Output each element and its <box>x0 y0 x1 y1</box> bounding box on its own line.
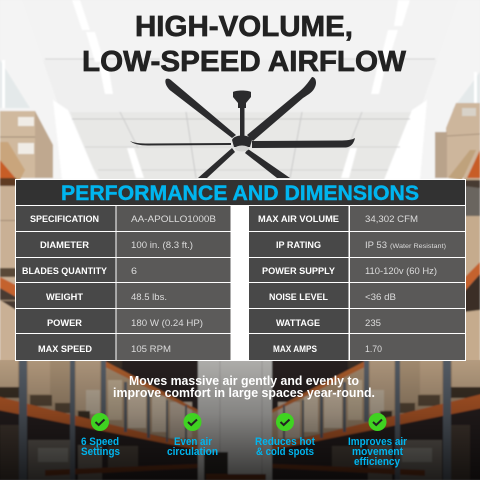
left strip <box>0 178 16 368</box>
label: Reduces hot <box>255 436 315 448</box>
title: LOW-SPEED AIRFLOW <box>82 46 407 78</box>
table: left specifications: 105 RPM <box>131 344 171 355</box>
table: right specifications: 235 <box>365 318 381 329</box>
icon: check <box>368 413 386 431</box>
table: right specifications: 34,302 CFM <box>365 214 418 225</box>
table: left specifications: BLADES QUANTITY <box>22 266 108 277</box>
label: Improves air <box>348 436 408 448</box>
table: right specifications: 1.70 <box>365 344 382 355</box>
table: left specifications: 6 <box>131 266 137 277</box>
caption: Moves massive air gently and evenly to <box>129 373 359 388</box>
table: right specifications: WATTAGE <box>276 318 320 329</box>
panel: performance and dimensions <box>15 179 466 361</box>
title: HIGH-VOLUME, <box>135 11 353 43</box>
label <box>167 436 218 458</box>
feature: 6 speed settings <box>81 413 120 458</box>
lower warehouse <box>0 360 480 480</box>
table: right specifications: MAX AIR VOLUME <box>258 214 339 225</box>
table: right specifications: IP 53 <box>365 240 387 251</box>
table: right specifications: IP RATING <box>276 240 321 251</box>
table: left specifications: 100 in. (8.3 ft.) <box>131 240 193 251</box>
label: movement <box>352 446 403 458</box>
label: efficiency <box>354 456 401 468</box>
table: left specifications: 48.5 lbs. <box>131 292 167 303</box>
icon: ceiling fan <box>130 77 355 178</box>
table: right specifications: POWER SUPPLY <box>262 266 336 277</box>
label <box>81 436 120 458</box>
feature: improves air movement efficiency <box>348 413 408 468</box>
label: circulation <box>167 446 218 458</box>
label: & cold spots <box>256 446 314 458</box>
table: right specifications: MAX AMPS <box>273 344 317 355</box>
table: left specifications <box>16 206 230 360</box>
table: right specifications: 110-120v (60 Hz) <box>365 266 437 277</box>
label: Even air <box>174 436 213 448</box>
table: left specifications: POWER <box>47 318 82 329</box>
table: left specifications: SPECIFICATION <box>30 214 99 225</box>
title <box>82 11 407 78</box>
table: right specifications <box>249 206 465 360</box>
table: right specifications: NOISE LEVEL <box>269 292 328 303</box>
heading: PERFORMANCE AND DIMENSIONS <box>61 182 419 205</box>
table: left specifications: AA-APOLLO1000B <box>131 214 216 225</box>
table: left specifications: MAX SPEED <box>38 344 92 355</box>
icon: check <box>91 413 109 431</box>
right boxes <box>446 103 480 178</box>
table: left specifications: DIAMETER <box>40 240 89 251</box>
label <box>348 436 408 468</box>
icon: check <box>276 413 294 431</box>
right strip <box>464 178 480 368</box>
table: left specifications: 180 W (0.24 HP) <box>131 318 203 329</box>
caption <box>113 373 375 400</box>
feature: even air circulation <box>167 413 218 458</box>
heading band <box>16 180 465 205</box>
label <box>255 436 315 458</box>
feature: reduces hot and cold spots <box>255 413 315 458</box>
label: Settings <box>81 446 120 458</box>
table: right specifications: (Water Resistant) <box>390 244 446 250</box>
table: left specifications: WEIGHT <box>46 292 83 303</box>
left boxes <box>0 111 53 178</box>
icon: check <box>184 413 202 431</box>
caption: improve comfort in large spaces year-round. <box>113 385 375 400</box>
label: 6 Speed <box>81 436 119 448</box>
table: right specifications: <36 dB <box>365 292 396 303</box>
